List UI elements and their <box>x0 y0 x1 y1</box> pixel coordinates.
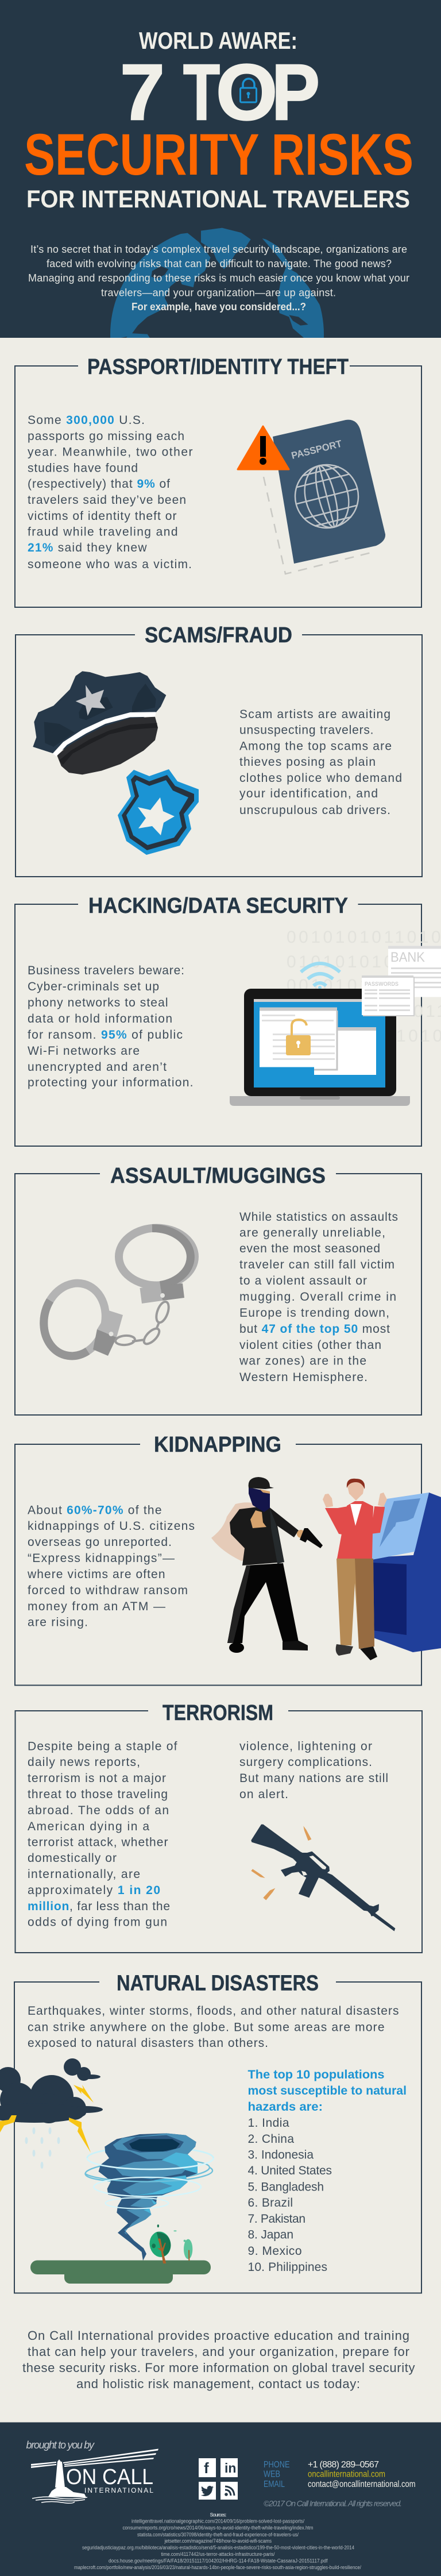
logo: on call international: ON CALL <box>66 2465 153 2489</box>
text block: left column: American dying in a <box>28 1820 149 1833</box>
illustration: atm <box>372 1493 441 1652</box>
text block: overseas go unreported. <box>28 1536 172 1549</box>
sources: intelligenttravel.nationalgeographic.com/2014/09/16/problem-solved-lost-passports/ <box>131 2519 304 2524</box>
text block <box>28 964 193 1089</box>
logo: on call international: INTERNATIONAL <box>84 2486 153 2494</box>
text block: mugging. Overall crime in <box>239 1290 396 1304</box>
text block: violent cities (other than <box>239 1339 381 1352</box>
text block: fraud while traveling and <box>28 525 178 539</box>
text block: top 10 populations: hazards are: <box>248 2100 323 2114</box>
contact details: EMAIL <box>264 2479 285 2489</box>
heading: PASSPORT/IDENTITY THEFT <box>87 355 349 379</box>
text block: phony networks to steal <box>28 996 168 1009</box>
illustration: binary background: 0010101 <box>287 976 372 995</box>
text block: left column: terrorist attack, whether <box>28 1836 168 1849</box>
contact details: +1 (888) 289–0567 <box>308 2460 379 2470</box>
icon: handcuffs <box>36 1228 195 1363</box>
heading: KIDNAPPING <box>154 1433 281 1457</box>
text block: unscrupulous cab drivers. <box>239 804 390 817</box>
icon: wifi <box>301 963 340 989</box>
sources: docs.house.gov/meetings/FA/FA18/20151117/104202/HHRG-114-FA18-Wstate-CassaraJ-20151117.pdf <box>109 2558 328 2563</box>
text block: left column: threat to those traveling <box>28 1788 168 1801</box>
heading: NATURAL DISASTERS <box>117 1972 319 1996</box>
contact details: PHONE <box>264 2460 289 2470</box>
copyright: ©2017 On Call International. All rights reserved. <box>264 2499 402 2508</box>
text block: are generally unreliable, <box>239 1226 385 1240</box>
icon: facebook <box>199 2458 216 2477</box>
heading: HACKING/DATA SECURITY <box>88 894 348 918</box>
text block: forced to withdraw ransom <box>28 1584 188 1597</box>
text block: right column: violence, lightening or <box>239 1740 372 1753</box>
brought to you by: brought to you by <box>26 2439 95 2451</box>
icon: tornado <box>85 2133 214 2261</box>
illustration: robber <box>211 1477 323 1653</box>
icon: bullets <box>251 1826 311 1900</box>
text block: exposed to natural disasters than others. <box>28 2037 268 2050</box>
header banner <box>0 0 441 340</box>
illustration: binary background: 0010101011010 <box>287 928 441 947</box>
text block <box>27 1504 195 1629</box>
text block: war zones) are in the <box>239 1355 366 1367</box>
icon: laptop <box>230 989 410 1106</box>
text block: left column: approximately 1 in 20 <box>28 1884 160 1897</box>
text block: left column: internationally, are <box>28 1868 140 1881</box>
contact details: WEB <box>264 2469 280 2479</box>
sources: consumerreports.org/cro/news/2014/06/ways-to-avoid-identity-theft-while-traveling/index.htm <box>123 2525 314 2531</box>
text block: top 10 populations: 7. Pakistan <box>248 2212 305 2226</box>
text block: Among the top scams are <box>239 740 392 753</box>
heading: 7 top: P <box>272 48 320 137</box>
text block: but 47 of the top 50 most <box>239 1322 390 1336</box>
document: bank <box>388 946 441 997</box>
text block: unsuspecting travelers. <box>239 724 373 736</box>
text block: data or hold information <box>28 1012 172 1025</box>
heading: 7 top <box>120 48 320 137</box>
icon: facebook: f <box>204 2459 209 2477</box>
text block: left column: odds of dying from gun <box>28 1915 167 1929</box>
heading: for international travelers: FOR INTERNATIONAL TRAVELERS <box>26 186 410 213</box>
icon: linkedin: in <box>225 2461 236 2475</box>
text block: top 10 populations: 10. Philippines <box>248 2261 327 2274</box>
text block: 21% said they knew <box>28 541 147 554</box>
contact details: contact@oncallinternational.com <box>308 2479 416 2489</box>
text block: left column: daily news reports, <box>28 1756 140 1769</box>
icon: passport: PASSPORT <box>290 438 343 461</box>
text block: top 10 populations: 8. Japan <box>248 2228 293 2242</box>
text block: right column: surgery complications. <box>239 1756 372 1769</box>
icon: rss <box>220 2482 238 2500</box>
text block: Business travelers beware: <box>28 964 184 977</box>
closing text: that can help your travelers, and your organization, prepare for <box>28 2344 409 2359</box>
icon: rifle <box>251 1825 395 1931</box>
text block: Earthquakes, winter storms, floods, and other natural disasters <box>28 2004 399 2018</box>
text block: top 10 populations: 2. China <box>248 2132 294 2146</box>
contact details <box>264 2460 416 2489</box>
text block: Wi-Fi networks are <box>28 1044 140 1058</box>
heading: 7 top: 7 <box>120 48 165 137</box>
sources: seguridadjusticiaypaz.org.mx/biblioteca/analisis-estadistico/send/5-analisis-estadistico/199-the-50-most-violent-cities-in-the-world-2014 <box>82 2545 354 2551</box>
text block: someone who was a victim. <box>28 558 192 571</box>
heading: SCAMS/FRAUD <box>145 623 292 647</box>
panel: assault/muggings <box>15 1164 421 1415</box>
rain <box>25 2127 60 2169</box>
text block: top 10 populations: 5. Bangladesh <box>248 2181 324 2193</box>
text block: top 10 populations <box>248 2068 407 2274</box>
text block: studies have found <box>28 462 138 475</box>
text block: are rising. <box>28 1615 88 1629</box>
intro text: For example, have you considered...? <box>131 301 306 313</box>
panel: terrorism <box>15 1701 422 1953</box>
document: bank: BANK <box>390 950 425 965</box>
text block: top 10 populations: 1. India <box>248 2116 289 2130</box>
text block: even the most seasoned <box>239 1242 380 1255</box>
heading: ASSAULT/MUGGINGS <box>110 1164 326 1188</box>
text block: Western Hemisphere. <box>239 1371 368 1384</box>
icon: police cap <box>33 671 166 774</box>
sources <box>74 2512 361 2570</box>
text block: clothes police who demand <box>239 772 402 785</box>
text block: where victims are often <box>27 1568 165 1581</box>
sources: Sources: <box>210 2512 226 2517</box>
icon: open padlock <box>286 1020 311 1055</box>
panel: natural disasters <box>0 1972 421 2293</box>
text block <box>28 414 193 571</box>
text block: left column: Despite being a staple of <box>28 1740 177 1753</box>
text block: left column <box>28 1740 177 1929</box>
icon: passport <box>264 420 385 574</box>
logo: on call international <box>31 2448 158 2503</box>
sources: time.com/4117442/us-terror-attacks-infrastructure-paris/ <box>161 2551 275 2557</box>
text block <box>239 1210 398 1384</box>
illustration: victim <box>323 1479 387 1660</box>
document: passwords: PASSWORDS <box>365 981 399 988</box>
icon: warning triangle <box>238 426 289 469</box>
icon: twitter <box>199 2482 216 2500</box>
closing text: and holistic risk management, contact us today: <box>76 2377 360 2391</box>
text block: travelers said they’ve been <box>28 493 186 507</box>
text block <box>239 708 402 817</box>
text block: Europe is trending down, <box>239 1306 389 1320</box>
closing text: On Call International provides proactive education and training <box>28 2328 409 2343</box>
text block: “Express kidnappings”— <box>28 1552 175 1565</box>
text block: your identification, and <box>239 787 378 800</box>
text block: victims of identity theft or <box>28 510 177 523</box>
text block: protecting your information. <box>28 1076 193 1089</box>
heading: 7 top: O <box>216 48 277 137</box>
icon: police badge <box>118 769 199 855</box>
text block: top 10 populations: 9. Mexico <box>248 2245 302 2258</box>
text block: top 10 populations: most susceptible to natural <box>248 2084 407 2097</box>
sources: statista.com/statistics/307098/identity-theft-and-fraud-experience-of-travelers-us/ <box>137 2532 299 2538</box>
text block: money from an ATM — <box>28 1600 165 1613</box>
text block: Scam artists are awaiting <box>239 708 390 721</box>
illustration: binary background <box>287 928 441 1046</box>
text block: right column <box>239 1740 388 1801</box>
icon: linkedin <box>220 2458 238 2477</box>
text block: About 60%-70% of the <box>28 1504 162 1517</box>
text block: top 10 populations: 6. Brazil <box>248 2196 293 2209</box>
illustration: binary background: 0101010101 <box>287 952 408 971</box>
icon: padlock <box>240 79 256 102</box>
text block: left column: abroad. The odds of an <box>28 1804 169 1817</box>
lightning <box>0 2085 94 2153</box>
panel: kidnapping <box>15 1433 441 1686</box>
text block: thieves posing as plain <box>239 755 376 769</box>
text block: left column: terrorism is not a major <box>28 1772 166 1785</box>
text block: can strike anywhere on the globe. But some areas are more <box>28 2021 385 2034</box>
text block: right column: But many nations are still <box>239 1772 388 1785</box>
panel: passport/identity theft <box>15 355 421 607</box>
intro text: Managing and responding to these risks is much easier once you know what your <box>28 272 409 284</box>
text block: traveler can still fall victim <box>239 1258 394 1271</box>
document: passwords <box>362 975 415 1016</box>
text block: left column: domestically or <box>28 1852 117 1865</box>
text block: to a violent assault or <box>239 1274 367 1287</box>
intro text: faced with evolving risks that can be difficult to navigate. The good news? <box>47 258 392 269</box>
closing text: these security risks. For more information on global travel security <box>22 2361 415 2375</box>
sources: maplecroft.com/portfolio/new-analysis/2016/03/23/natural-hazards-14bn-people-face-severe-risks-south-asia-region-struggles-build-resilience/ <box>74 2565 361 2570</box>
text block: year. Meanwhile, two other <box>28 446 193 458</box>
intro text <box>28 244 409 313</box>
text block: left column: million, far less than the <box>28 1900 170 1913</box>
text block: unencrypted and aren’t <box>28 1061 167 1074</box>
panel: hacking/data security <box>15 894 441 1146</box>
closing text <box>22 2328 415 2391</box>
heading: 7 top: T <box>183 48 220 137</box>
text block: right column: on alert. <box>239 1788 288 1801</box>
sources: jetsetter.com/magazine/748/how-to-avoid-wifi-scams <box>164 2538 272 2544</box>
text block: Some 300,000 U.S. <box>28 414 145 427</box>
text block: kidnappings of U.S. citizens <box>28 1520 195 1533</box>
heading: world aware: WORLD AWARE: <box>139 27 297 54</box>
contact details: oncallinternational.com <box>308 2469 385 2479</box>
text block: Cyber-criminals set up <box>28 980 159 993</box>
text block: top 10 populations: 4. United States <box>248 2164 332 2177</box>
text block: While statistics on assaults <box>239 1210 398 1224</box>
icon: storm cloud <box>0 2058 103 2169</box>
text block: top 10 populations: 3. Indonesia <box>248 2149 314 2161</box>
globe illustration <box>105 228 327 340</box>
text block <box>28 2004 399 2050</box>
icon: ground and trees <box>30 2224 211 2284</box>
footer <box>0 2422 441 2576</box>
text block: top 10 populations: The top 10 populations <box>248 2068 385 2081</box>
heading: TERRORISM <box>163 1701 273 1725</box>
text block: (respectively) that 9% of <box>28 477 170 491</box>
panel: scams/fraud <box>16 623 422 877</box>
text block: passports go missing each <box>28 430 184 443</box>
text block: for ransom. 95% of public <box>28 1028 183 1042</box>
intro text: It’s no secret that in today’s complex travel security landscape, organizations are <box>30 244 407 255</box>
intro text: travelers—and your organization—are up against. <box>101 287 336 299</box>
